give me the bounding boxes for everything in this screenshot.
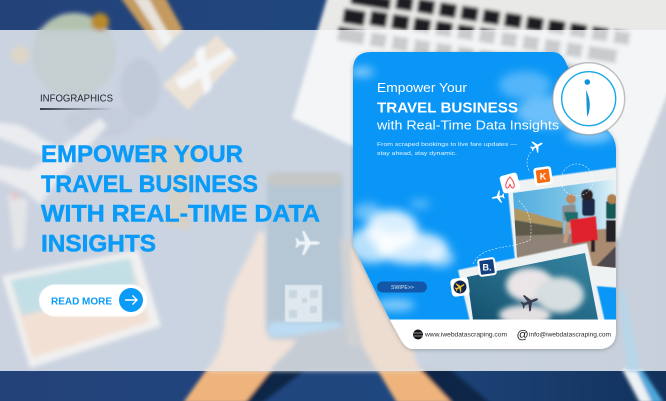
- card subtext: From scraped bookings to live fare updates —: [377, 142, 517, 148]
- card heading: TRAVEL BUSINESS: [377, 100, 518, 116]
- footer strip: [390, 320, 616, 349]
- pen strip: [622, 369, 652, 401]
- swipe pill: SWIPE>>: [391, 285, 414, 291]
- icon: booking badge: B.: [482, 262, 492, 272]
- right laptop shadow: [618, 290, 640, 371]
- traveller three: [606, 201, 616, 219]
- card heading: with Real-Time Data Insights: [376, 118, 559, 132]
- contact: email: [516, 328, 611, 342]
- swipe pill: [377, 282, 427, 292]
- read more button: [39, 284, 147, 316]
- contact: email: @: [516, 328, 529, 342]
- main heading: [41, 141, 320, 258]
- main heading: EMPOWER YOUR: [41, 141, 243, 168]
- eyebrow: infographics label: INFOGRAPHICS: [40, 92, 113, 104]
- sky background: [345, 45, 625, 321]
- social post card: [345, 45, 625, 350]
- main heading: TRAVEL BUSINESS: [41, 171, 258, 198]
- contact: email: info@iwebdatascraping.com: [529, 332, 611, 338]
- main heading: INSIGHTS: [41, 230, 156, 258]
- ornament: [32, 13, 116, 97]
- toy plane: [0, 122, 75, 166]
- right hand: [345, 235, 420, 371]
- icon: arrow circle: [119, 288, 143, 312]
- icon: plane top: [528, 138, 545, 155]
- traveller two: [582, 198, 595, 216]
- icon: yellow plane badge: [450, 277, 470, 297]
- card heading: Empower Your: [377, 81, 467, 95]
- left hand: [207, 232, 296, 371]
- photo: travellers at airport: [505, 167, 620, 288]
- main heading: WITH REAL-TIME DATA: [41, 201, 320, 228]
- photo: plane in cloudy sky: [458, 243, 605, 325]
- brand logo badge: [553, 63, 625, 135]
- phone QR code: [285, 285, 322, 322]
- phone: [267, 172, 343, 337]
- read more button: READ MORE: [51, 296, 112, 308]
- icon: airbnb badge: [499, 172, 521, 194]
- icon: plane in photo: [520, 295, 538, 312]
- shadow behind hand: [340, 238, 362, 347]
- keyboard: [336, 0, 631, 86]
- icon: plane left: [491, 190, 505, 204]
- bottom band hands: [183, 369, 272, 401]
- laptop body: [292, 0, 666, 240]
- gifts: [120, 0, 183, 52]
- icon: K badge: K: [540, 172, 547, 182]
- icon: K badge: [533, 166, 553, 186]
- contact: website: [413, 330, 507, 340]
- phone plane icon: [295, 231, 320, 255]
- card subtext: stay ahead, stay dynamic.: [377, 151, 458, 157]
- card heading: [376, 81, 559, 132]
- postcard: [2, 250, 161, 368]
- contact: website: www.iwebdatascraping.com: [424, 332, 507, 338]
- dashed flight paths: [473, 152, 593, 264]
- shadow below phone: [268, 325, 380, 371]
- eyebrow: infographics label: [40, 92, 114, 110]
- traveller one: [562, 204, 577, 221]
- icon: booking badge: [477, 257, 497, 277]
- card subtext: [377, 142, 517, 157]
- tan star: [145, 140, 205, 230]
